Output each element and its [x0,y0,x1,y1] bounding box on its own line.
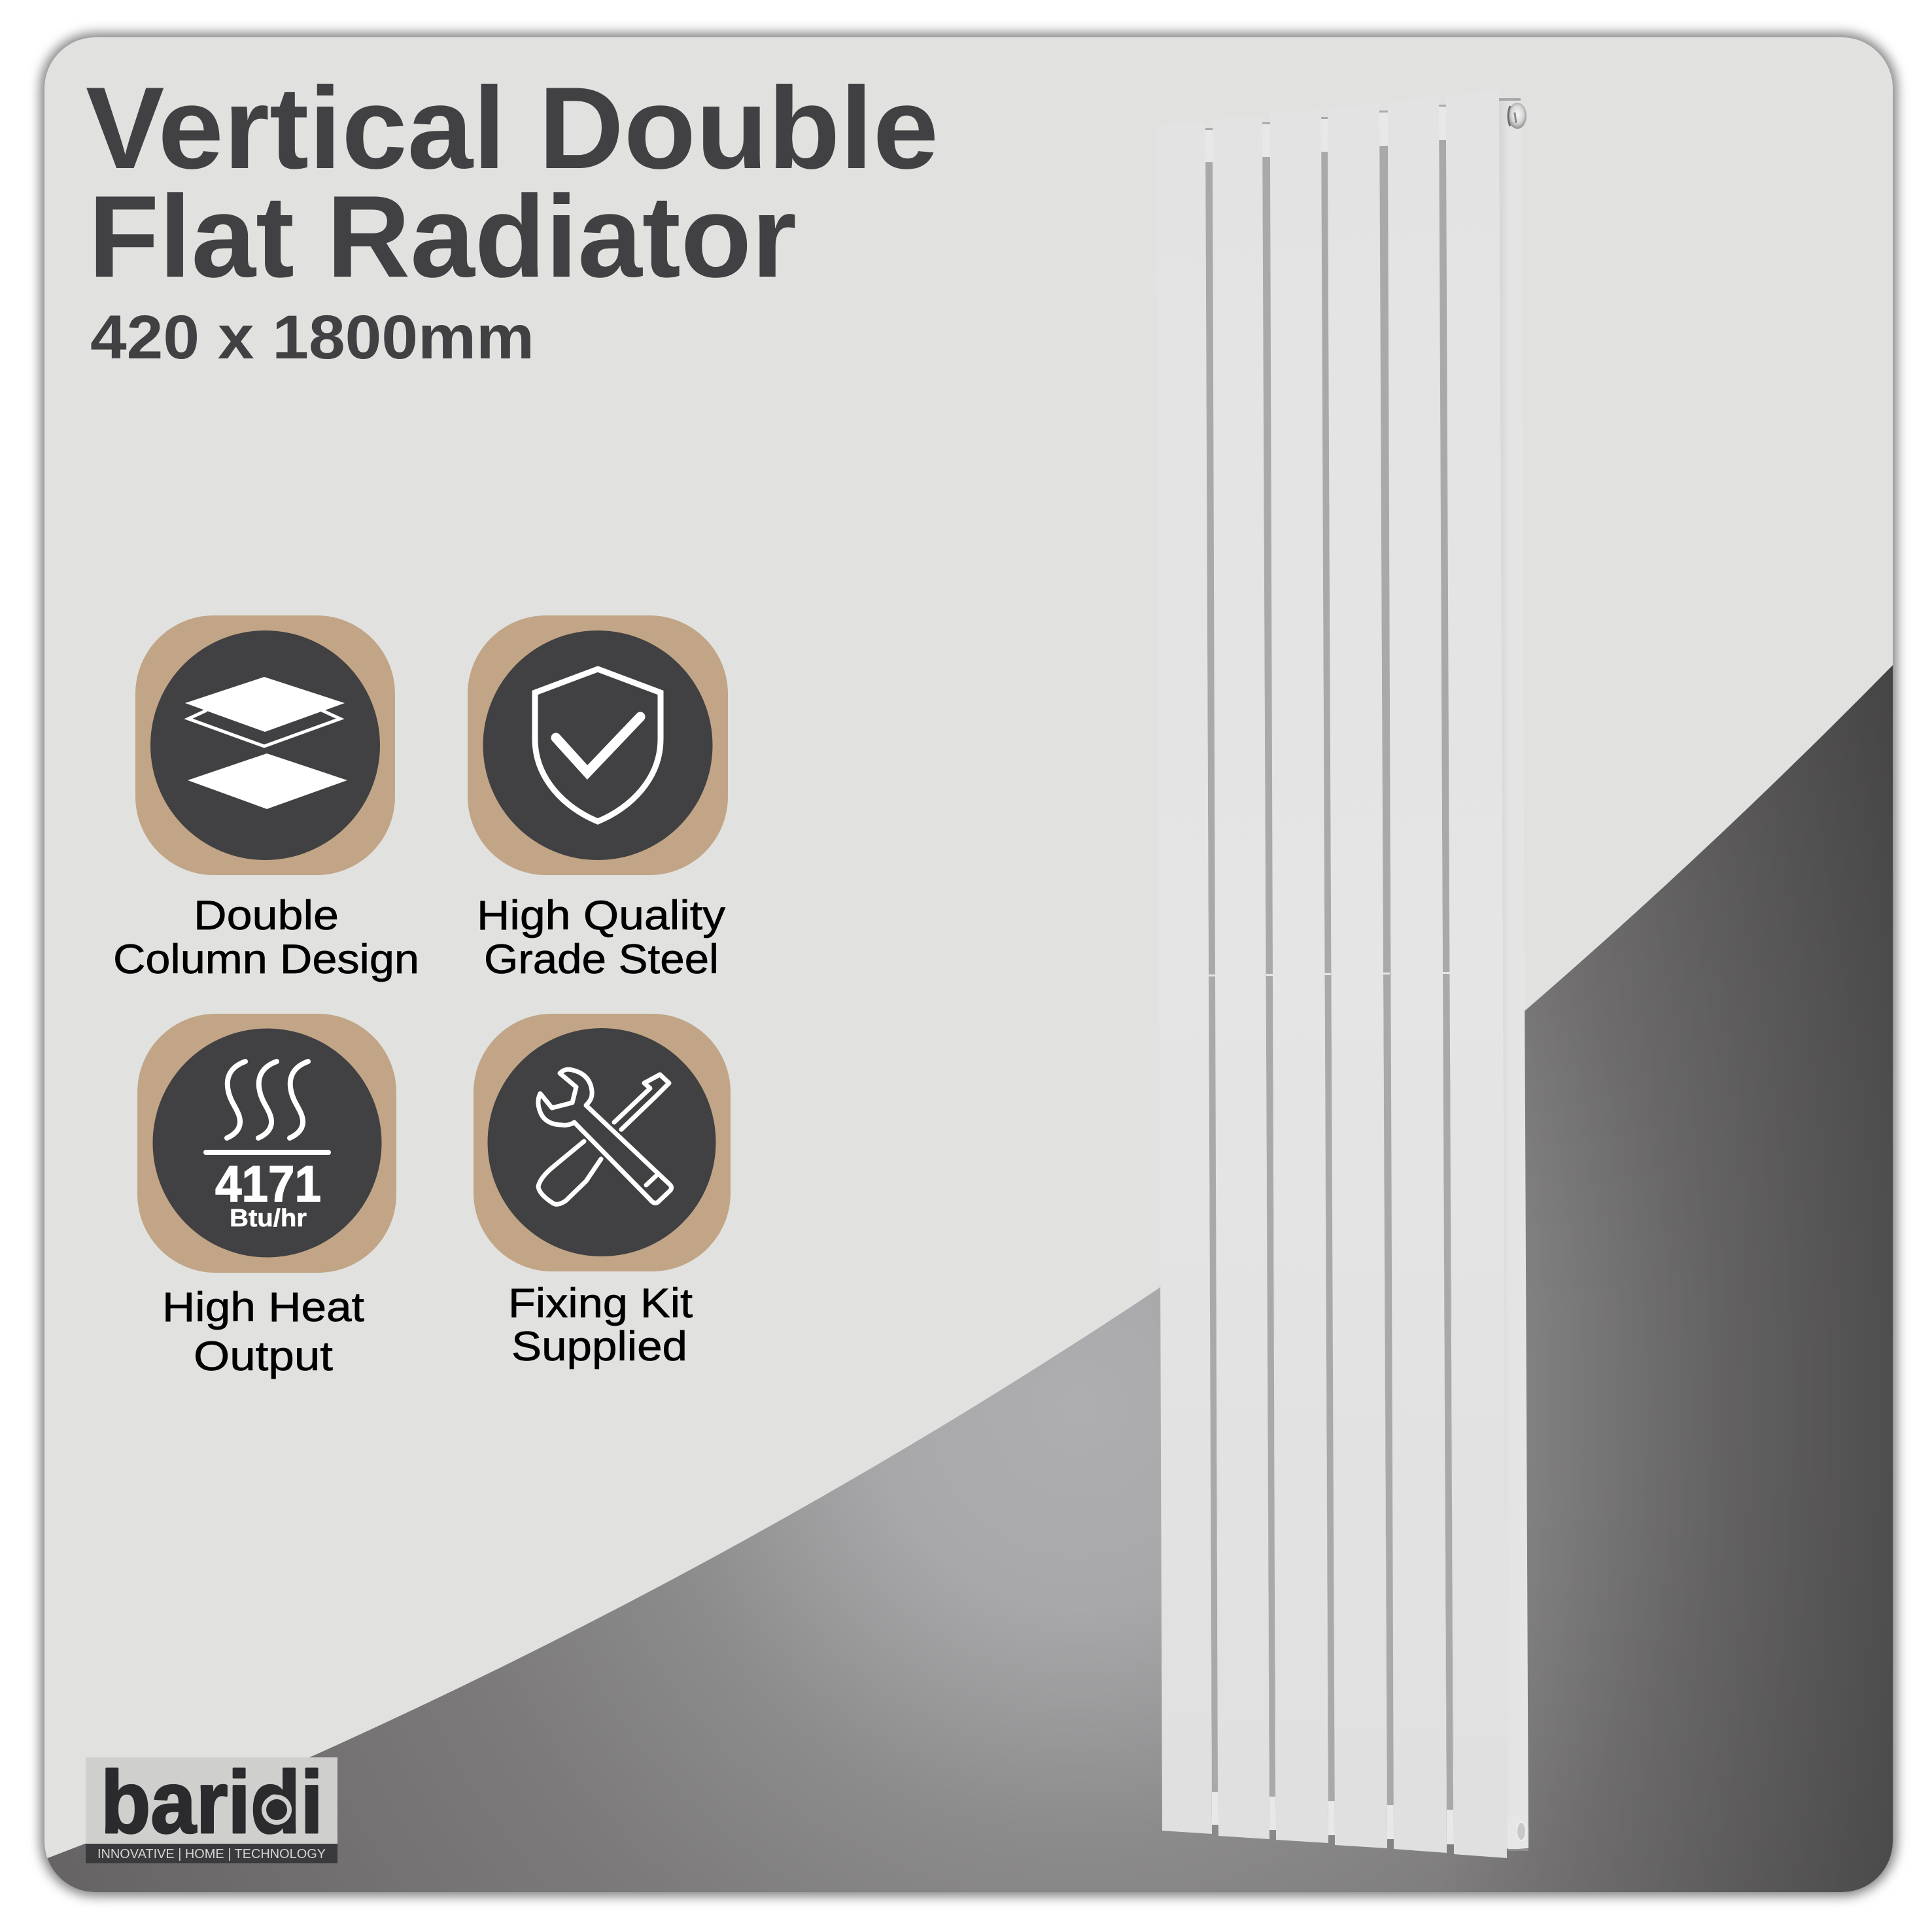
label: Fixing Kit [508,1281,693,1326]
title [86,63,939,372]
product: radiator [1156,90,1528,1858]
bottom valve [1508,1815,1528,1851]
logo: baridi: INNOVATIVE | HOME | TECHNOLOGY [97,1847,326,1861]
logo: baridi: baridi [101,1753,323,1852]
label [113,893,419,982]
feature: fixing kit supplied [474,1014,731,1370]
label: Supplied [511,1324,687,1370]
flat panels [1156,90,1507,1858]
label: High Heat [162,1285,365,1330]
icon: heat waves [227,1061,308,1138]
value: 4171 Btu/hr: Btu/hr [230,1205,307,1232]
label: Output [194,1334,334,1379]
icon: shield with check [535,669,661,821]
feature: double column design [113,615,419,982]
divider bar [203,1150,331,1155]
title: Flat Radiator [88,171,797,302]
icon: stacked layers [185,677,347,809]
icon: wrench and screwdriver [538,1069,671,1204]
title: Vertical Double [86,63,939,193]
gaps between panels [1205,105,1454,1844]
label [508,1281,693,1370]
label: Double [194,893,339,939]
back tube [1498,98,1528,1848]
feature: high quality grade steel [468,615,728,982]
label [162,1285,365,1379]
label: Grade Steel [484,937,719,982]
feature: high heat output [137,1014,396,1379]
value: 4171 Btu/hr: 4171 [215,1155,321,1213]
label: High Quality [477,893,726,939]
size subtitle: 420 x 1800mm [90,303,534,372]
top valve [1499,98,1527,129]
label: Column Design [113,937,419,982]
label [477,893,726,982]
dark curved background shape [39,665,1897,1897]
